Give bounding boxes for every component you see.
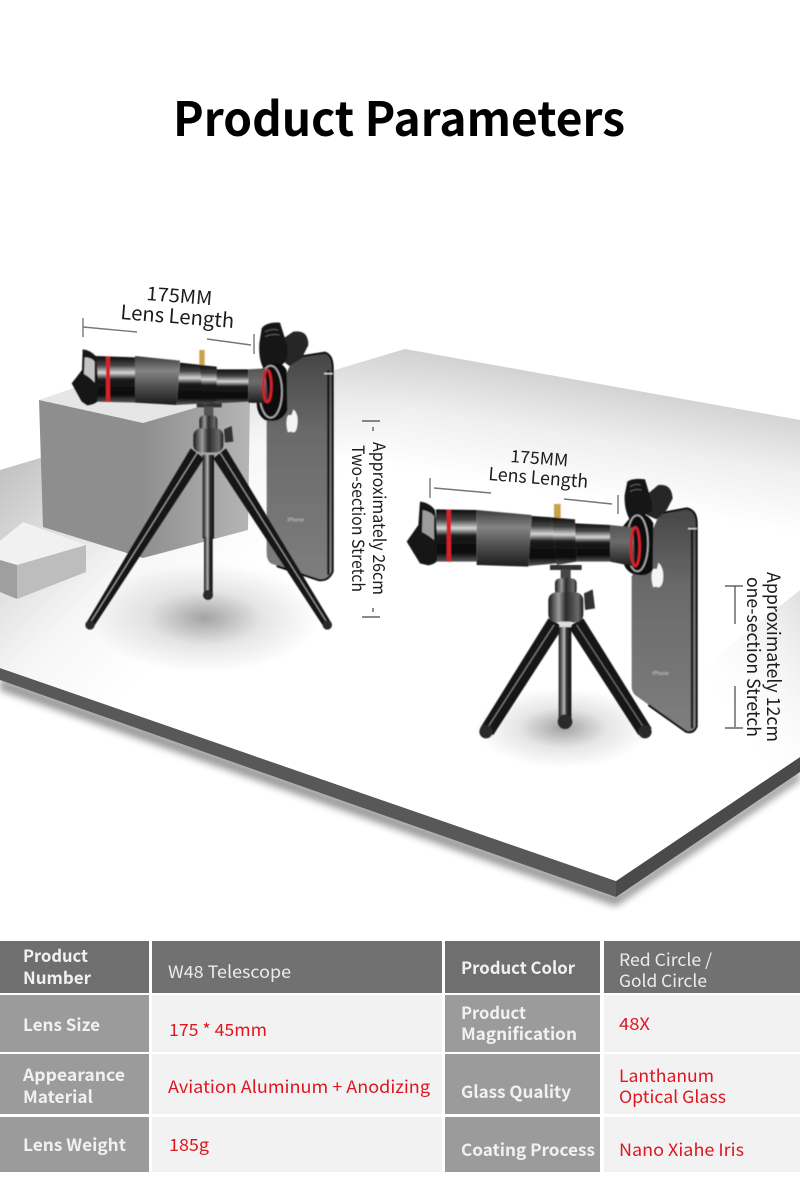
shadow: second tripod — [475, 688, 651, 768]
phone — [632, 508, 697, 732]
row: lens weight and coating process — [0, 1117, 800, 1172]
tripod legs — [479, 618, 652, 738]
large grey box — [39, 360, 250, 558]
row: appearance material and glass quality: Glass Quality — [461, 1078, 571, 1103]
dimension: approximately 12cm one-section stretch — [725, 572, 787, 742]
row: product number and color: Red Circle / — [619, 946, 712, 971]
lens ring — [257, 363, 287, 421]
platform scene — [0, 349, 800, 906]
row: product number and color: Number — [23, 964, 92, 989]
tripod ball head — [548, 565, 595, 627]
row: appearance material and glass quality: Optical Glass — [619, 1083, 726, 1108]
row: appearance material and glass quality: Aviation Aluminum + Anodizing — [168, 1073, 430, 1098]
phone: iPhone — [652, 670, 669, 677]
dimension: approximately 12cm one-section stretch: one-section Stretch — [741, 577, 767, 737]
row: appearance material and glass quality: Appearance — [22, 1061, 125, 1086]
dimension: lens length, first telescope: 175MM — [146, 279, 213, 311]
dimension: lens length, second telescope: Lens Length — [488, 460, 589, 494]
tripod legs — [85, 448, 332, 630]
lens ring — [623, 514, 653, 575]
row: product number and color: Gold Circle — [619, 967, 707, 992]
row: lens size and magnification: 175 * 45mm — [169, 1016, 267, 1041]
row: lens size and magnification — [0, 995, 800, 1052]
dimension: approximately 26cm two-section stretch — [347, 421, 393, 617]
telescope on tripod with phone: two-section — [72, 323, 333, 630]
apple logo — [286, 409, 298, 432]
dimension: approximately 12cm one-section stretch: Approximately 12cm — [761, 572, 787, 742]
phone — [267, 353, 333, 580]
dimension: lens length, first telescope — [83, 279, 254, 354]
tripod ball head — [193, 403, 233, 452]
row: lens weight and coating process: Lens Weight — [23, 1131, 126, 1156]
row: product number and color: Product — [23, 942, 88, 967]
row: lens weight and coating process: 185g — [169, 1131, 209, 1156]
row: lens size and magnification: Product — [461, 999, 526, 1024]
row: lens size and magnification: 48X — [619, 1010, 650, 1035]
row: appearance material and glass quality: Lanthanum — [619, 1062, 714, 1087]
telescope on tripod with phone: one-section — [407, 479, 697, 738]
dimension: lens length, second telescope: 175MM — [510, 442, 569, 472]
phone clip — [259, 323, 308, 369]
title: Product Parameters — [173, 81, 625, 150]
telescope body — [407, 502, 640, 567]
shadow: first tripod — [90, 563, 320, 673]
row: lens size and magnification: Lens Size — [23, 1011, 100, 1036]
row: product number and color: Product Color — [461, 954, 576, 979]
dimension: approximately 26cm two-section stretch: Two-section Stretch — [347, 445, 372, 592]
dimension: lens length, second telescope — [430, 442, 618, 514]
row: lens size and magnification: Magnification — [461, 1020, 577, 1045]
row: appearance material and glass quality: Material — [23, 1083, 93, 1108]
small grey box — [0, 522, 86, 599]
apple logo — [652, 563, 663, 587]
row: lens weight and coating process: Coating Process — [461, 1136, 595, 1161]
dimension: approximately 26cm two-section stretch: Approximately 26cm — [368, 442, 393, 595]
dimension: lens length, first telescope: Lens Length — [120, 296, 235, 334]
row: product number and color — [0, 941, 800, 993]
phone: iPhone — [287, 516, 304, 523]
row: lens weight and coating process: Nano Xiahe Iris — [619, 1136, 744, 1161]
specification table — [0, 941, 800, 1172]
row: appearance material and glass quality — [0, 1054, 800, 1114]
telescope body — [72, 349, 271, 405]
phone clip — [625, 479, 673, 520]
row: product number and color: W48 Telescope — [168, 958, 291, 983]
